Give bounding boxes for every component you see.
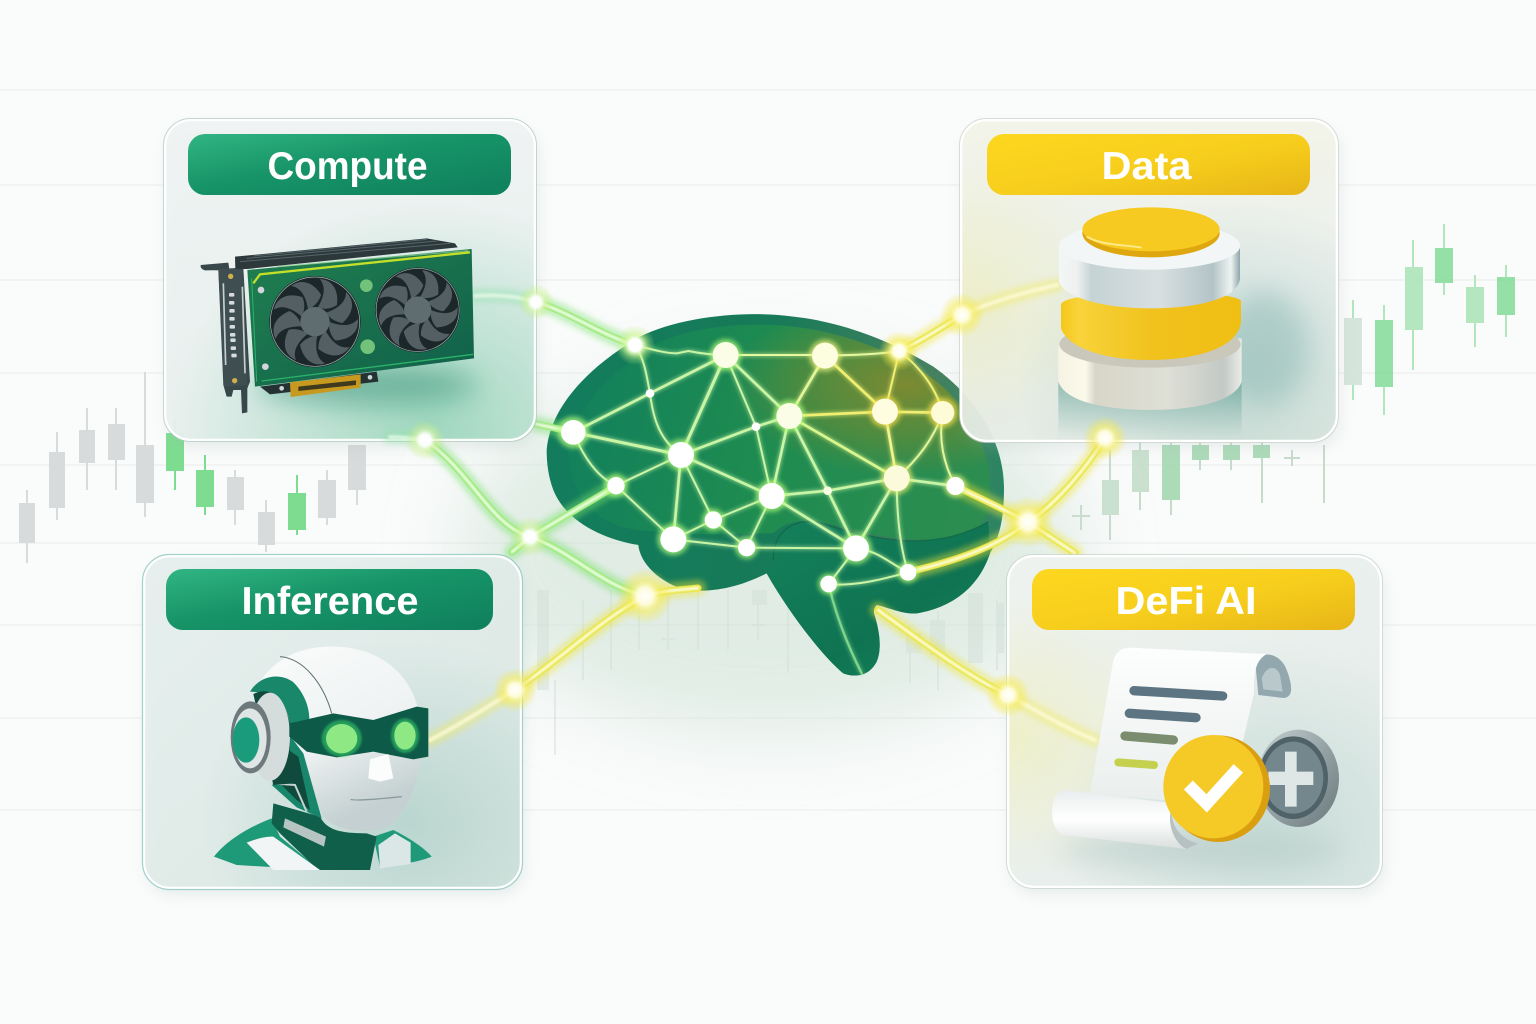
brain neural network — [557, 335, 967, 673]
candlestick chart: right — [1072, 224, 1515, 540]
brain halo — [460, 365, 1080, 735]
icon: graphics card — [201, 238, 477, 413]
neural network glow — [557, 335, 967, 595]
label pill: inference — [166, 569, 493, 630]
brain — [547, 314, 1004, 676]
icon: contract scroll with verified coin — [1052, 648, 1343, 867]
candlestick chart: bottom center — [537, 590, 1004, 755]
label pill: data — [987, 134, 1310, 195]
panel: inference card base — [142, 554, 524, 894]
candlestick chart: left — [19, 372, 366, 563]
label pill: data: Data — [1102, 145, 1192, 188]
label pill: compute — [188, 134, 511, 195]
label pill: defi ai: DeFi AI — [1116, 580, 1256, 623]
panel: data card base — [960, 118, 1340, 448]
icon: database stack — [1058, 207, 1308, 437]
panel: compute card base — [164, 118, 538, 448]
label pill: inference: Inference — [242, 580, 418, 623]
panel: data — [987, 134, 1310, 437]
panel: compute — [188, 134, 511, 413]
line stubs fading into cards — [390, 285, 1095, 740]
icon: robot head — [214, 647, 432, 870]
neural network nodes — [561, 338, 964, 592]
label pill: compute: Compute — [268, 145, 428, 188]
label pill: defi ai — [1032, 569, 1355, 630]
panel: defi ai card base — [1006, 554, 1384, 894]
panel: defi ai — [1032, 569, 1355, 867]
neural network edges — [573, 345, 955, 673]
panel: inference — [166, 569, 493, 870]
glowing connection lines — [425, 302, 1105, 695]
node sparkles — [405, 284, 1127, 717]
